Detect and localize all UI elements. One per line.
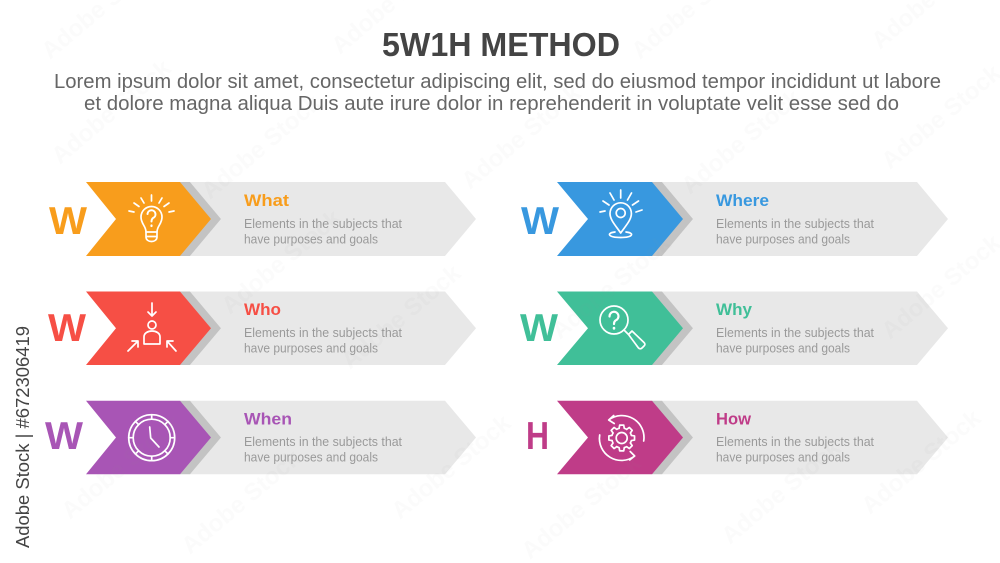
watermark pattern: Adobe Stock	[717, 434, 847, 550]
icon: location pin	[600, 190, 642, 238]
purple chevron	[86, 401, 211, 474]
stock credit vertical text: Adobe Stock | #672306419	[13, 326, 33, 548]
icon: magnifier with question mark	[600, 306, 645, 349]
description: have purposes and goals	[244, 342, 378, 356]
panel: why	[520, 292, 948, 365]
description: have purposes and goals	[716, 450, 850, 464]
description	[244, 326, 403, 356]
heading: how: How	[716, 410, 751, 428]
watermark pattern: Adobe Stock	[457, 79, 587, 195]
letter W: W	[49, 200, 87, 243]
grey arrow bar	[190, 292, 476, 365]
description: have purposes and goals	[244, 232, 378, 246]
icon: gear with cycle arrows	[599, 416, 644, 460]
icon: light bulb	[129, 195, 174, 242]
description	[244, 217, 403, 246]
arrow shadow	[180, 182, 221, 256]
description: have purposes and goals	[716, 232, 850, 246]
heading: when: When	[244, 410, 292, 428]
red chevron	[86, 292, 211, 365]
subtitle text: et dolore magna aliqua Duis aute irure dolor in reprehenderit in voluptate velit esse sed do	[84, 93, 899, 115]
green chevron	[557, 292, 683, 365]
grey arrow bar	[190, 182, 476, 256]
icon: person with arrows	[128, 303, 176, 351]
letter H: H	[526, 415, 549, 458]
grey arrow bar	[662, 182, 948, 256]
watermark pattern: Adobe Stock	[57, 409, 187, 525]
description: Elements in the subjects that	[244, 326, 403, 340]
description: Elements in the subjects that	[244, 217, 403, 231]
heading: who: Who	[244, 301, 281, 319]
description: have purposes and goals	[716, 342, 850, 356]
arrow shadow	[652, 182, 693, 256]
arrow shadow	[652, 292, 693, 365]
description: Elements in the subjects that	[244, 435, 403, 449]
watermark pattern: Adobe Stock	[47, 54, 177, 170]
letter W: W	[520, 307, 558, 350]
panel: how	[526, 401, 948, 474]
watermark pattern: Adobe Stock	[197, 89, 327, 205]
icon: clock	[129, 415, 175, 461]
panel: who	[48, 292, 476, 365]
panel: what	[49, 182, 476, 256]
letter W: W	[48, 307, 86, 350]
watermark pattern: Adobe Stock	[387, 409, 517, 525]
grey arrow bar	[190, 401, 476, 474]
arrow shadow	[652, 401, 693, 474]
watermark pattern: Adobe Stock	[517, 449, 647, 563]
description: Elements in the subjects that	[716, 217, 875, 231]
heading: where: Where	[716, 192, 769, 210]
orange chevron	[86, 182, 211, 256]
description	[716, 435, 875, 464]
watermark pattern: Adobe Stock	[677, 84, 807, 200]
watermark pattern: Adobe Stock	[337, 259, 467, 375]
description	[716, 326, 875, 356]
watermark pattern: Adobe Stock	[857, 404, 987, 520]
subtitle text: Lorem ipsum dolor sit amet, consectetur adipiscing elit, sed do eiusmod tempor incididunt ut labore	[54, 71, 941, 93]
heading: why: Why	[716, 301, 753, 319]
arrow shadow	[180, 292, 221, 365]
heading: what: What	[244, 192, 290, 210]
watermark pattern: Adobe Stock	[217, 204, 347, 320]
letter W: W	[45, 415, 83, 458]
watermark pattern: Adobe Stock	[177, 444, 307, 560]
letter W: W	[521, 200, 559, 243]
description	[244, 435, 403, 464]
description: Elements in the subjects that	[716, 435, 875, 449]
panel: when	[45, 401, 476, 474]
description: have purposes and goals	[244, 450, 378, 464]
subtitle text	[54, 71, 941, 115]
arrow shadow	[180, 401, 221, 474]
grey arrow bar	[662, 292, 948, 365]
magenta chevron	[557, 401, 683, 474]
watermark pattern: Adobe Stock	[547, 229, 677, 345]
blue chevron	[557, 182, 683, 256]
description	[716, 217, 875, 246]
grey arrow bar	[662, 401, 948, 474]
panel: where	[521, 182, 948, 256]
description: Elements in the subjects that	[716, 326, 875, 340]
title: 5W1H METHOD	[382, 26, 620, 63]
